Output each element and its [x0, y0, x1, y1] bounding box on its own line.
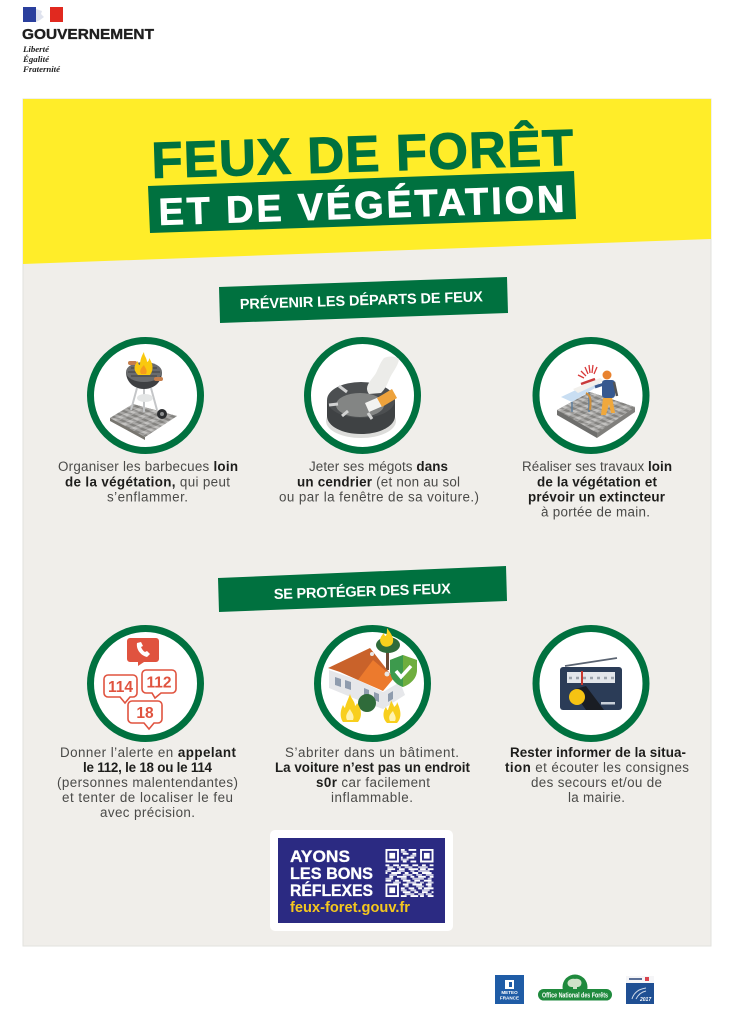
callout text: feux-foret.gouv.fr — [290, 900, 410, 916]
text: travaux: à portée de main. — [541, 504, 650, 520]
panel: cendrier — [279, 340, 479, 504]
title line 1: FEUX DE FORÊT — [151, 118, 574, 189]
text: alerte: avec précision. — [100, 805, 195, 820]
panel: abri — [275, 628, 471, 805]
text: cendrier: ou par la fenêtre de sa voiture.) — [279, 490, 479, 504]
logo: SDIS 2017 — [626, 976, 654, 1004]
icon: emergency numbers: 112 — [146, 674, 172, 692]
yellow header band — [23, 99, 711, 264]
text: radio: tion et écouter les consignes — [505, 760, 689, 775]
logo: Météo France — [495, 975, 524, 1004]
text: abri: inflammable. — [331, 790, 413, 805]
icon: ashtray — [308, 340, 418, 450]
logo: Office National des Forêts — [538, 974, 612, 1000]
text: abri — [275, 745, 471, 805]
logo: Office National des Forêts: Office National des Forêts — [542, 990, 608, 1000]
logo: Gouvernement: Liberté — [22, 45, 49, 54]
text: cendrier — [279, 459, 479, 504]
title line 2: ET DE VÉGÉTATION — [158, 177, 565, 234]
text: abri: La voiture n’est pas un endroit — [275, 760, 471, 775]
logo: Gouvernement: GOUVERNEMENT — [22, 26, 154, 43]
text: barbecue: s’enflammer. — [107, 490, 188, 504]
text: radio — [505, 745, 689, 805]
text: radio: Rester informer de la situa- — [510, 745, 686, 760]
callout text: AYONS — [290, 848, 350, 866]
text: alerte: (personnes malentendantes) — [57, 775, 238, 790]
logo: Météo France: FRANCE — [500, 996, 519, 1000]
text: radio: la mairie. — [568, 790, 625, 805]
logo: SDIS 2017: 2017 — [639, 997, 651, 1003]
text: alerte: le 112, le 18 ou le 114 — [83, 760, 213, 775]
section heading: prévenir: PRÉVENIR LES DÉPARTS DE FEUX — [240, 288, 483, 313]
text: alerte — [57, 745, 238, 820]
panel: radio — [505, 628, 689, 805]
text: alerte: Donner l’alerte en appelant — [60, 745, 237, 760]
logo: Gouvernement — [22, 7, 154, 74]
text: cendrier: Jeter ses mégots dans — [309, 459, 448, 474]
text: travaux: prévoir un extincteur — [528, 490, 666, 504]
icon: emergency numbers: 18 — [136, 705, 154, 722]
icon: radio — [536, 628, 646, 738]
text: travaux: Réaliser ses travaux loin — [522, 459, 672, 474]
logo: Gouvernement: Fraternité — [22, 65, 60, 74]
text: travaux: de la végétation et — [537, 474, 658, 490]
text: radio: des secours et/ou de — [531, 775, 662, 790]
callout text: LES BONS — [290, 865, 373, 883]
icon: emergency numbers: 114 — [108, 679, 133, 696]
callout: QR card — [270, 830, 453, 931]
icon: emergency numbers — [90, 628, 200, 738]
panel: barbecue — [58, 340, 238, 504]
section heading: se protéger — [218, 566, 507, 612]
panel: alerte — [57, 628, 238, 820]
main panel — [23, 99, 711, 946]
QR code — [386, 849, 434, 897]
section heading: prévenir — [219, 277, 508, 323]
text: abri: S’abriter dans un bâtiment. — [285, 745, 459, 760]
text: barbecue: de la végétation, qui peut — [65, 474, 230, 490]
text: travaux — [522, 459, 672, 520]
text: barbecue: Organiser les barbecues loin — [58, 459, 238, 474]
text: cendrier: un cendrier (et non au sol — [297, 474, 460, 490]
panel: travaux — [522, 340, 672, 520]
text: alerte: et tenter de localiser le feu — [62, 790, 233, 805]
title — [148, 118, 576, 234]
icon: house with shield — [318, 628, 428, 738]
logo: Gouvernement: Égalité — [22, 54, 49, 64]
logo: Météo France: METEO — [501, 990, 518, 995]
icon: worker — [536, 340, 646, 450]
section heading: se protéger: SE PROTÉGER DES FEUX — [274, 580, 451, 603]
title banner — [148, 171, 576, 233]
text: abri: s0r car facilement — [316, 775, 430, 790]
callout text: RÉFLEXES — [290, 881, 373, 900]
callout text — [290, 848, 410, 916]
text: barbecue — [58, 459, 238, 504]
icon: barbecue — [90, 340, 200, 450]
